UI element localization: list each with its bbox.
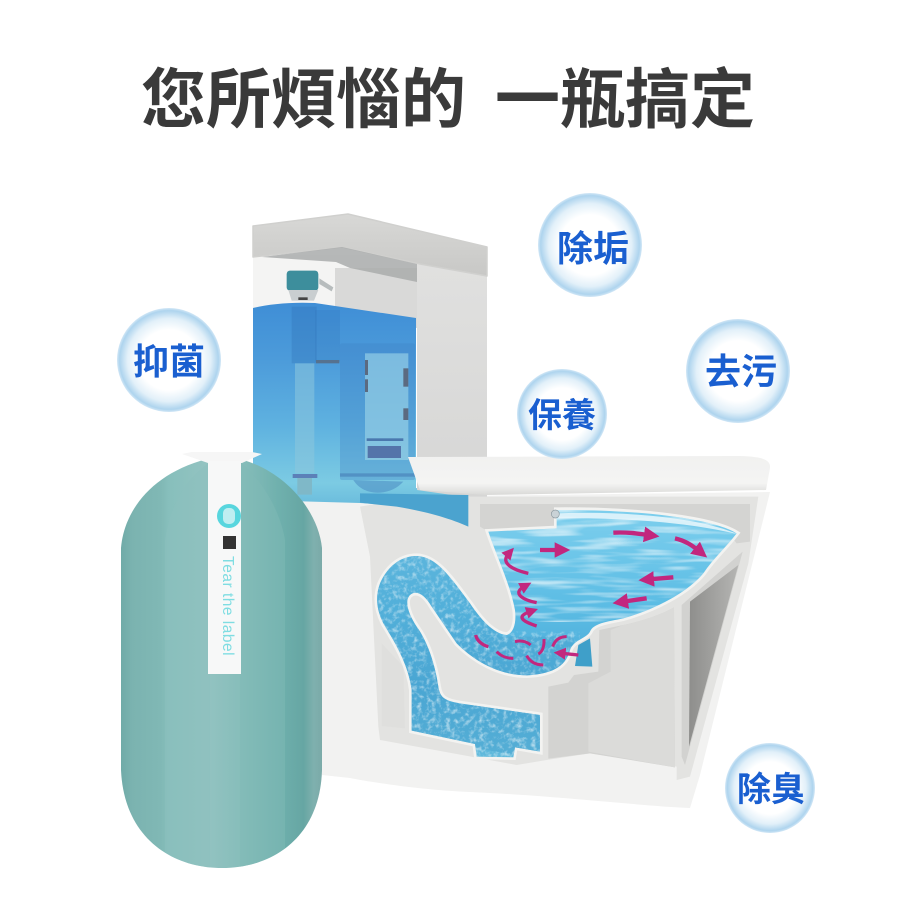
toilet seat lid [408,456,770,495]
deep trap water tone [370,553,573,760]
bubble: 去污: 去污 [705,343,777,395]
toilet body [300,492,770,808]
title: 您所煩惱的 [141,47,466,141]
bubble: 除臭: 除臭 [737,762,805,811]
bubble: 除垢: 除垢 [557,220,629,272]
right triangular cavity [682,552,743,765]
lower cavity [548,607,675,767]
cut section face [360,495,758,780]
water streaks [487,508,740,622]
bubble: 保養: 保養 [528,388,596,437]
label tab [182,452,262,463]
pipe speckle upper [373,553,488,697]
tank right panel [417,264,487,500]
bottle body [120,450,324,870]
small water pocket [575,638,592,667]
blue tank base [360,493,468,527]
dark cavity [689,565,738,747]
bubble: 抑菌: 抑菌 [133,333,205,385]
product bottle [120,450,324,870]
title: 一瓶搞定 [495,47,755,141]
label code [223,536,236,549]
toilet illustration [253,214,770,808]
tank inner wall [335,268,417,328]
fill valve and flush mechanism [287,271,415,495]
tank lid [253,214,487,282]
bottle facets [165,852,210,868]
water [377,510,736,758]
bubble: 除垢 [538,193,642,297]
pipe speckle middle [488,632,580,676]
bubble: 去污 [686,319,790,423]
tank back wall [253,255,417,315]
jet nozzle [551,510,559,518]
left lower gap [382,643,405,728]
bubble: 抑菌 [117,308,221,412]
label text: Tear the label [219,556,236,656]
label logo [217,504,241,528]
jet highlight [558,513,737,534]
water outline [377,510,737,757]
rim channel [480,504,750,543]
pipe speckle lower [412,696,540,757]
lower cavity shade [588,607,675,767]
bowl cross-section [360,493,760,780]
flow arrows [476,532,699,665]
tank water [253,303,470,528]
bubble: 保養 [517,369,607,459]
tear label strip [208,461,241,674]
bubble: 除臭 [725,743,815,833]
